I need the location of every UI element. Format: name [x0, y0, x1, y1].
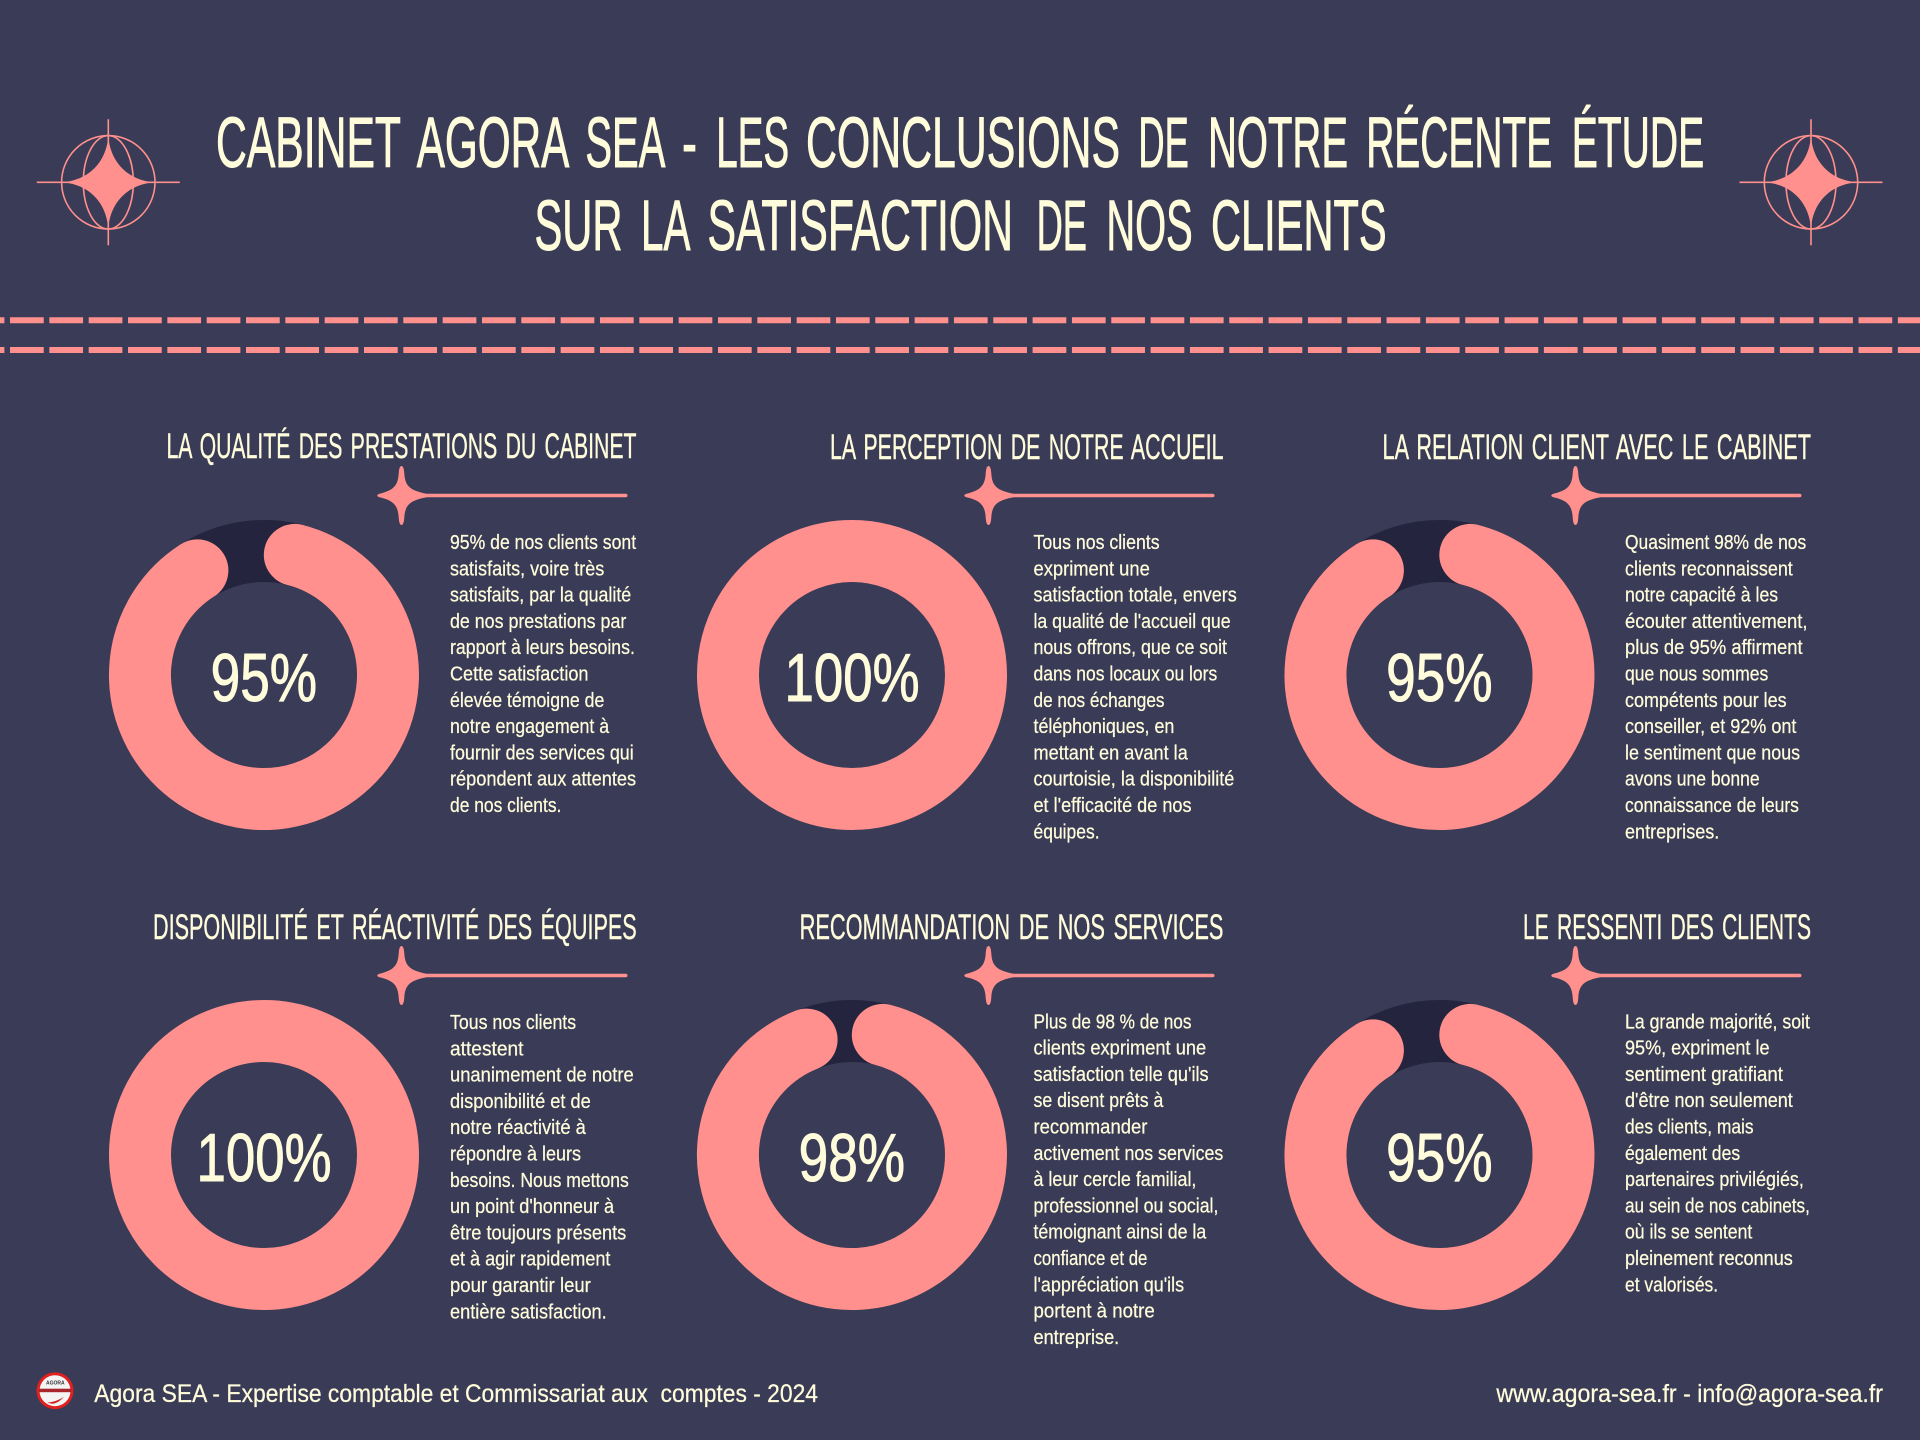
title: ÉTUDE — [1572, 104, 1704, 183]
description: Cette satisfaction — [450, 662, 588, 686]
description: compétents pour les — [1625, 689, 1787, 712]
description — [1034, 1010, 1223, 1349]
description: dans nos locaux ou lors — [1034, 662, 1217, 686]
donut chart 95% — [1315, 1031, 1564, 1279]
footer right text: www.agora-sea.fr - info@agora-sea.fr — [1495, 1380, 1883, 1408]
title: - — [682, 104, 697, 183]
description: partenaires privilégiés, — [1625, 1168, 1804, 1191]
icon: star with line — [377, 466, 628, 525]
title: CLIENTS — [1211, 187, 1387, 266]
description: être toujours présents — [450, 1221, 626, 1244]
description: mettant en avant la — [1034, 741, 1188, 764]
panel: disponibilité et réactivité — [140, 908, 637, 1323]
description: activement nos services — [1034, 1142, 1223, 1165]
panel: ressenti des clients — [1315, 908, 1811, 1296]
title: SEA — [585, 104, 666, 183]
description: clients expriment une — [1034, 1037, 1206, 1060]
description: notre engagement à — [450, 715, 610, 738]
icon: star with line — [377, 946, 628, 1005]
description: connaissance de leurs — [1625, 794, 1799, 817]
heading: LA QUALITÉ DES PRESTATIONS DU CABINET — [166, 427, 636, 466]
donut chart 98%: 98% — [799, 1120, 905, 1196]
description: satisfaction totale, envers — [1034, 584, 1237, 607]
description: unanimement de notre — [450, 1064, 634, 1087]
heading: RECOMMANDATION DE NOS SERVICES — [800, 908, 1224, 947]
panel: qualité des prestations — [140, 427, 636, 817]
description — [1625, 531, 1808, 843]
description: entreprises. — [1625, 820, 1719, 843]
icon: star with line — [1551, 946, 1802, 1005]
description: Tous nos clients — [1034, 531, 1160, 554]
description: entière satisfaction. — [450, 1300, 607, 1323]
donut chart 95% — [1315, 551, 1564, 799]
description: où ils se sentent — [1625, 1221, 1753, 1244]
description: expriment une — [1034, 557, 1150, 580]
title: SATISFACTION — [708, 187, 1013, 266]
description: au sein de nos cabinets, — [1625, 1194, 1810, 1217]
description: à leur cercle familial, — [1034, 1168, 1196, 1191]
title: SUR — [534, 187, 622, 266]
description: conseiller, et 92% ont — [1625, 715, 1797, 738]
description: avons une bonne — [1625, 768, 1760, 791]
description: de nos clients. — [450, 794, 561, 817]
title: CABINET — [216, 104, 401, 183]
title: NOS — [1106, 187, 1193, 266]
description: disponibilité et de — [450, 1090, 591, 1113]
description: élevée témoigne de — [450, 689, 604, 712]
description: des clients, mais — [1625, 1116, 1754, 1138]
description: de nos échanges — [1034, 689, 1164, 712]
icon: left globe star — [37, 119, 180, 245]
description: sentiment gratifiant — [1625, 1063, 1783, 1086]
title: AGORA — [417, 104, 570, 183]
description: répondent aux attentes — [450, 768, 636, 791]
description: Tous nos clients — [450, 1011, 576, 1034]
description: satisfaction telle qu'ils — [1034, 1063, 1209, 1086]
panel: relation client — [1315, 428, 1811, 843]
donut chart 95%: 95% — [211, 640, 317, 716]
description: écouter attentivement, — [1625, 610, 1808, 633]
description: d'être non seulement — [1625, 1089, 1793, 1112]
description: que nous sommes — [1625, 662, 1768, 686]
description: également des — [1625, 1142, 1740, 1165]
heading: LA PERCEPTION DE NOTRE ACCUEIL — [830, 428, 1224, 467]
title: LES — [716, 104, 789, 183]
icon: star with line — [964, 466, 1214, 525]
panel: perception de l'accueil — [728, 428, 1237, 843]
panel: recommandation des services — [728, 908, 1224, 1349]
description: se disent prêts à — [1034, 1089, 1164, 1112]
description: l'appréciation qu'ils — [1034, 1273, 1184, 1296]
description: de nos prestations par — [450, 610, 626, 633]
description: Quasiment 98% de nos — [1625, 531, 1806, 554]
icon: star with line — [964, 946, 1214, 1005]
description: attestent — [450, 1037, 524, 1060]
description: 95%, expriment le — [1625, 1037, 1770, 1060]
donut chart 100% — [728, 551, 976, 799]
description: nous offrons, que ce soit — [1034, 636, 1227, 659]
title — [216, 104, 1704, 266]
description: répondre à leurs — [450, 1142, 581, 1166]
description — [450, 531, 636, 817]
description: portent à notre — [1034, 1300, 1155, 1323]
logo: AGORA — [46, 1381, 65, 1387]
title: NOTRE — [1208, 104, 1348, 183]
donut chart 100%: 100% — [196, 1120, 332, 1196]
icon: star with line — [1551, 466, 1802, 525]
description: satisfaits, voire très — [450, 557, 604, 580]
description: témoignant ainsi de la — [1034, 1221, 1207, 1244]
description: rapport à leurs besoins. — [450, 636, 635, 659]
description: équipes. — [1034, 820, 1100, 843]
donut chart 100% — [140, 1031, 388, 1279]
description: besoins. Nous mettons — [450, 1169, 629, 1192]
description: fournir des services qui — [450, 741, 634, 764]
description: et à agir rapidement — [450, 1248, 611, 1271]
description: et valorisés. — [1625, 1273, 1718, 1296]
description — [1625, 1010, 1810, 1296]
donut chart 100%: 100% — [784, 640, 920, 716]
title: DE — [1037, 187, 1087, 266]
title: RÉCENTE — [1366, 104, 1552, 183]
description: notre capacité à les — [1625, 584, 1778, 607]
description: professionnel ou social, — [1034, 1194, 1218, 1217]
description: et l'efficacité de nos — [1034, 794, 1192, 817]
donut chart 95%: 95% — [1386, 1120, 1493, 1196]
description: courtoisie, la disponibilité — [1034, 768, 1234, 791]
footer left text: Agora SEA - Expertise comptable et Commissariat aux comptes - 2024 — [94, 1380, 818, 1408]
description: clients reconnaissent — [1625, 557, 1793, 580]
description: un point d'honneur à — [450, 1195, 615, 1218]
description: téléphoniques, en — [1034, 715, 1174, 738]
description: confiance et de — [1034, 1247, 1147, 1270]
description — [1034, 531, 1237, 843]
description: pleinement reconnus — [1625, 1247, 1793, 1270]
donut chart 95% — [140, 551, 388, 799]
title: DE — [1138, 104, 1189, 183]
donut chart 98% — [728, 1031, 976, 1279]
description: Plus de 98 % de nos — [1034, 1010, 1192, 1033]
description: recommander — [1034, 1116, 1148, 1138]
icon: right globe star — [1740, 119, 1882, 245]
description: satisfaits, par la qualité — [450, 584, 631, 607]
description: la qualité de l'accueil que — [1034, 610, 1231, 633]
description: notre réactivité à — [450, 1116, 586, 1139]
description: La grande majorité, soit — [1625, 1010, 1810, 1033]
heading: DISPONIBILITÉ ET RÉACTIVITÉ DES ÉQUIPES — [153, 908, 637, 947]
title: CONCLUSIONS — [806, 104, 1120, 183]
description: le sentiment que nous — [1625, 741, 1800, 764]
logo — [36, 1372, 74, 1409]
description: entreprise. — [1034, 1326, 1119, 1349]
description — [450, 1011, 634, 1323]
description: 95% de nos clients sont — [450, 531, 636, 554]
description: plus de 95% affirment — [1625, 636, 1803, 659]
description: pour garantir leur — [450, 1274, 591, 1297]
title: LA — [641, 187, 691, 266]
donut chart 95%: 95% — [1386, 640, 1493, 716]
